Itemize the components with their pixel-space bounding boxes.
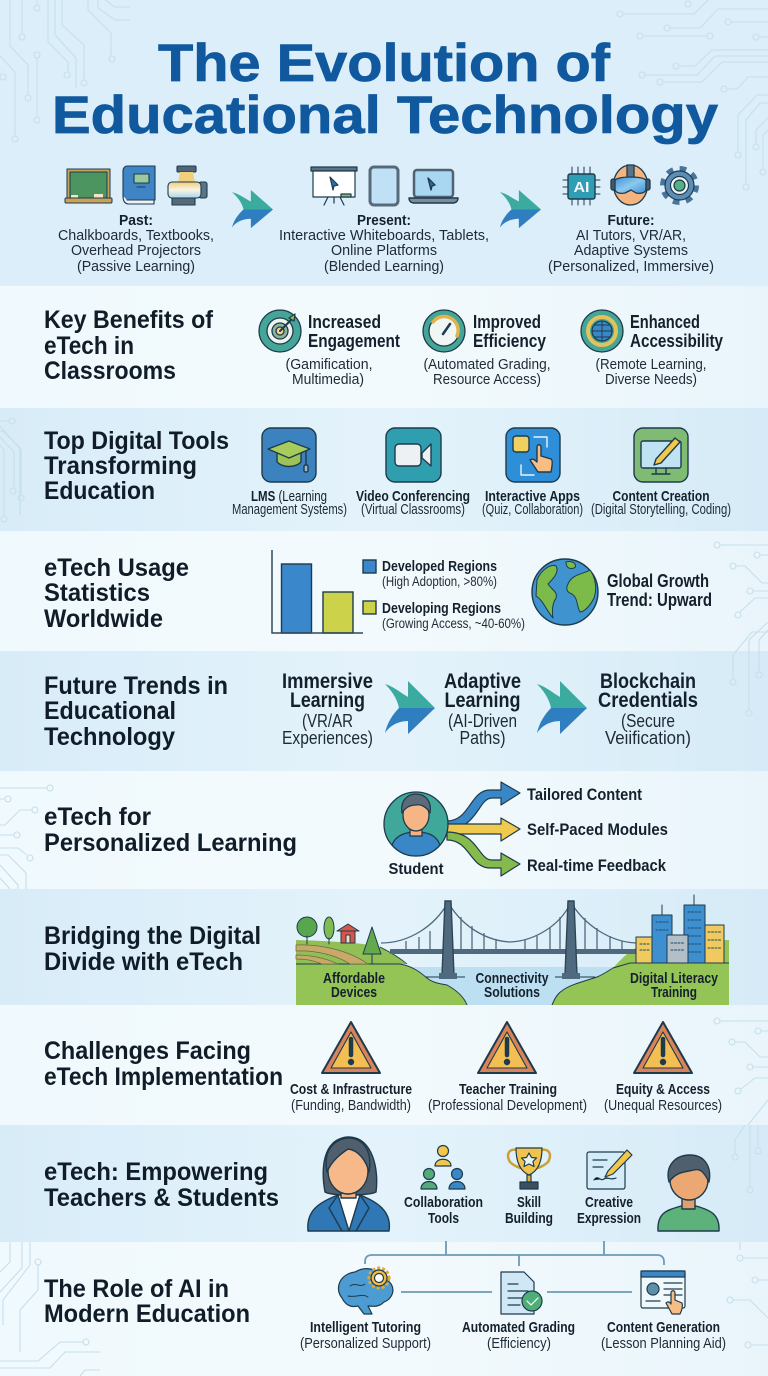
text: present: Interactive Whiteboards, Tablets,	[279, 228, 489, 244]
AI item: tutoring: (Personalized Support)	[300, 1336, 431, 1352]
AI item: tutoring	[300, 1319, 431, 1352]
AI item: grading: (Efficiency)	[487, 1336, 551, 1352]
tool: content creation: (Digital Storytelling, Coding)	[591, 502, 731, 518]
text: present: Present:	[357, 212, 411, 229]
text: future: (Personalized, Immersive)	[548, 259, 714, 275]
heading: eTech: Empowering	[44, 1158, 268, 1186]
icon: creative expression	[587, 1150, 632, 1189]
arrows: learning paths	[447, 782, 520, 876]
heading: Top Digital Tools	[44, 427, 229, 455]
text: future: Future:	[608, 212, 654, 229]
label: creative expression: Creative	[585, 1194, 633, 1211]
trend: adaptive learning: (AI-Driven	[448, 711, 517, 731]
heading: Bridging the Digital	[44, 922, 261, 950]
trend: adaptive learning	[444, 670, 521, 748]
legend: (High Adoption, >80%)	[382, 574, 497, 589]
legend: (Growing Access, ~40-60%)	[382, 616, 525, 631]
panel: timeline	[58, 165, 714, 275]
panel: empowering	[44, 1137, 719, 1231]
arrow: past to present	[232, 190, 273, 228]
icon: student	[384, 792, 448, 856]
trend: blockchain credentials	[598, 670, 698, 748]
benefit: efficiency	[424, 312, 550, 388]
challenge: equity: (Unequal Resources)	[604, 1098, 722, 1114]
tool: LMS detail: Management Systems)	[232, 502, 347, 518]
heading: Technology	[44, 723, 175, 751]
benefit: engagement: Increased	[308, 312, 381, 332]
heading	[44, 922, 261, 976]
heading	[44, 306, 214, 385]
heading: Key Benefits of	[44, 306, 214, 334]
benefit: accessibility: Enhanced	[630, 312, 700, 332]
labels: bridge sections: Connectivity	[476, 970, 549, 987]
label: collaboration: Collaboration	[404, 1194, 483, 1211]
text: global growth: Trend: Upward	[607, 590, 712, 610]
label: student: Student	[388, 861, 444, 878]
icon: warning	[634, 1022, 692, 1073]
text: past: Overhead Projectors	[71, 243, 201, 259]
label: real-time feedback: Real-time Feedback	[527, 856, 666, 875]
text: future: AI Tutors, VR/AR,	[576, 228, 686, 244]
benefit: efficiency: (Automated Grading,	[424, 356, 550, 373]
title: The Evolution of	[158, 34, 610, 93]
icon: laptop	[409, 170, 458, 203]
icon: AI chip: AI	[574, 179, 590, 196]
heading	[44, 554, 189, 633]
icon: VR headset	[611, 165, 650, 205]
heading	[44, 803, 297, 857]
legend	[363, 558, 525, 631]
AI item: grading: Automated Grading	[462, 1319, 575, 1336]
label: creative expression	[577, 1194, 641, 1227]
city	[636, 895, 724, 963]
AI item: content generation: Content Generation	[607, 1319, 720, 1336]
icon: brain with gear	[338, 1268, 393, 1314]
tool: content creation	[591, 488, 731, 518]
icon: gauge	[423, 310, 465, 352]
text: future	[548, 212, 714, 275]
AI item: tutoring: Intelligent Tutoring	[310, 1319, 421, 1336]
tool: video conferencing	[356, 488, 470, 518]
panel: future trends	[44, 670, 698, 751]
heading: Challenges Facing	[44, 1037, 251, 1065]
label: collaboration	[404, 1194, 483, 1227]
trend: adaptive learning: Paths)	[460, 728, 506, 748]
heading: Teachers & Students	[44, 1184, 279, 1212]
heading	[44, 427, 229, 505]
label: skill building: Building	[505, 1210, 553, 1227]
heading	[44, 672, 228, 751]
tool: LMS: LMS (Learning	[251, 488, 327, 505]
benefit: engagement: (Gamification,	[286, 356, 372, 373]
heading	[44, 1158, 279, 1212]
heading: Modern Education	[44, 1300, 250, 1328]
tool: interactive apps	[482, 488, 583, 518]
tool: interactive apps: Interactive Apps	[485, 488, 580, 505]
benefit: engagement: Engagement	[308, 331, 400, 351]
icon: overhead projector	[168, 166, 207, 205]
trend: immersive learning: (VR/AR	[302, 711, 353, 731]
label: collaboration: Tools	[428, 1210, 459, 1227]
heading: eTech Usage	[44, 554, 189, 582]
trend: immersive learning: Immersive	[282, 670, 373, 693]
panel: key benefits	[44, 306, 723, 388]
heading: eTech for	[44, 803, 151, 831]
text: present: Online Platforms	[331, 243, 437, 259]
icon: globe	[532, 559, 598, 625]
benefit: accessibility: Accessibility	[630, 331, 723, 351]
text: present	[279, 212, 489, 275]
icon: graduation cap	[262, 428, 316, 482]
challenge: equity	[604, 1081, 722, 1114]
icon: interactive apps	[506, 428, 560, 482]
title	[52, 34, 719, 145]
heading	[44, 1275, 250, 1328]
tool: video conferencing: (Virtual Classrooms)	[361, 502, 465, 518]
labels: bridge sections: Solutions	[484, 984, 540, 1001]
icon: adaptive gear	[663, 169, 696, 202]
benefit: engagement: Multimedia)	[292, 371, 364, 388]
panel: digital divide	[44, 895, 729, 1005]
label: skill building: Skill	[517, 1194, 541, 1211]
text: past: (Passive Learning)	[77, 259, 195, 275]
icon: textbook	[123, 166, 155, 204]
icon: student figure	[658, 1155, 719, 1231]
arrow	[537, 681, 587, 734]
trend: immersive learning: Learning	[290, 689, 365, 712]
challenge: training: Teacher Training	[459, 1081, 557, 1098]
panel: digital tools	[44, 427, 731, 518]
illustration: bridge	[296, 895, 729, 1005]
trend: blockchain credentials: Veiification)	[605, 728, 691, 748]
arrow	[385, 681, 435, 734]
legend: Developed Regions	[382, 558, 497, 575]
benefit: accessibility: (Remote Learning,	[596, 356, 706, 373]
labels: bridge sections: Digital Literacy	[630, 970, 719, 987]
heading: Educational	[44, 697, 176, 725]
challenge: equity: Equity & Access	[616, 1081, 710, 1098]
icon: warning	[478, 1022, 536, 1073]
label: self-paced modules: Self-Paced Modules	[527, 820, 668, 839]
trend: immersive learning: Experiences)	[282, 728, 373, 748]
trend: immersive learning	[282, 670, 373, 748]
icon: interactive whiteboard	[311, 167, 357, 205]
icon: teacher	[308, 1137, 389, 1231]
text: past: Past:	[119, 212, 153, 229]
labels: bridge sections: Training	[651, 984, 697, 1001]
label: tailored content: Tailored Content	[527, 785, 642, 804]
tool: video conferencing: Video Conferencing	[356, 488, 470, 505]
challenge: training: (Professional Development)	[428, 1098, 587, 1114]
benefit: engagement	[286, 312, 400, 388]
icon: content window	[641, 1271, 685, 1314]
challenge: cost	[290, 1081, 412, 1114]
heading: Education	[44, 477, 155, 505]
trend: adaptive learning: Adaptive	[444, 670, 521, 693]
panel: AI in education	[44, 1241, 726, 1352]
tool: interactive apps: (Quiz, Collaboration)	[482, 502, 583, 518]
icon: graded document	[501, 1272, 542, 1314]
heading: Future Trends in	[44, 672, 228, 700]
icon: video camera	[386, 428, 441, 482]
title: Educational Technology	[52, 86, 719, 145]
AI item: content generation	[601, 1319, 726, 1352]
benefit: accessibility	[596, 312, 723, 388]
panel: challenges	[44, 1022, 722, 1114]
tool: content creation: Content Creation	[612, 488, 710, 505]
trend: blockchain credentials: (Secure	[621, 711, 675, 731]
labels: bridge sections	[323, 970, 719, 1001]
bar chart	[272, 550, 363, 633]
benefit: efficiency: Improved	[473, 312, 541, 332]
icon: collaboration	[421, 1146, 465, 1189]
benefit: efficiency: Efficiency	[473, 331, 546, 351]
heading: eTech in	[44, 332, 134, 360]
trend: blockchain credentials: Credentials	[598, 689, 698, 712]
trend: adaptive learning: Learning	[444, 689, 520, 712]
legend: Developing Regions	[382, 600, 501, 617]
icon: accessibility globe	[581, 310, 623, 352]
heading: Transforming	[44, 452, 197, 480]
text: past: Chalkboards, Textbooks,	[58, 228, 214, 244]
connector lines	[365, 1241, 664, 1292]
heading: eTech Implementation	[44, 1063, 283, 1091]
challenge: cost: Cost & Infrastructure	[290, 1081, 412, 1098]
trend: blockchain credentials: Blockchain	[600, 670, 696, 693]
labels: bridge sections: Affordable	[323, 970, 385, 987]
text: global growth	[607, 571, 712, 610]
labels: bridge sections: Devices	[331, 984, 377, 1001]
icon: content creation	[634, 428, 688, 482]
icon: target	[259, 310, 301, 352]
arrow: present to future	[500, 190, 541, 228]
icon: chalkboard	[65, 169, 112, 203]
AI item: grading	[462, 1319, 575, 1352]
text: past	[58, 212, 214, 275]
heading: Statistics	[44, 579, 150, 607]
icon: tablet	[370, 167, 398, 205]
benefit: accessibility: Diverse Needs)	[605, 371, 697, 388]
AI item: content generation: (Lesson Planning Aid)	[601, 1336, 726, 1352]
heading: Worldwide	[44, 605, 163, 633]
heading: The Role of AI in	[44, 1275, 229, 1303]
challenge: cost: (Funding, Bandwidth)	[291, 1098, 411, 1114]
icon: warning	[322, 1022, 380, 1073]
icon: AI chip	[563, 167, 600, 205]
benefit: efficiency: Resource Access)	[433, 371, 541, 388]
panel: personalized learning	[44, 782, 668, 878]
challenge: training	[428, 1081, 587, 1114]
icon: trophy	[508, 1148, 550, 1189]
heading: Divide with eTech	[44, 948, 243, 976]
panel: usage statistics	[44, 550, 712, 633]
text: present: (Blended Learning)	[324, 259, 444, 275]
heading	[44, 1037, 283, 1091]
text: global growth: Global Growth	[607, 571, 709, 591]
trees and house	[297, 917, 381, 964]
heading: Classrooms	[44, 357, 176, 385]
text: future: Adaptive Systems	[574, 243, 688, 259]
label: skill building	[505, 1194, 553, 1227]
label: creative expression: Expression	[577, 1210, 641, 1227]
heading: Personalized Learning	[44, 829, 297, 857]
